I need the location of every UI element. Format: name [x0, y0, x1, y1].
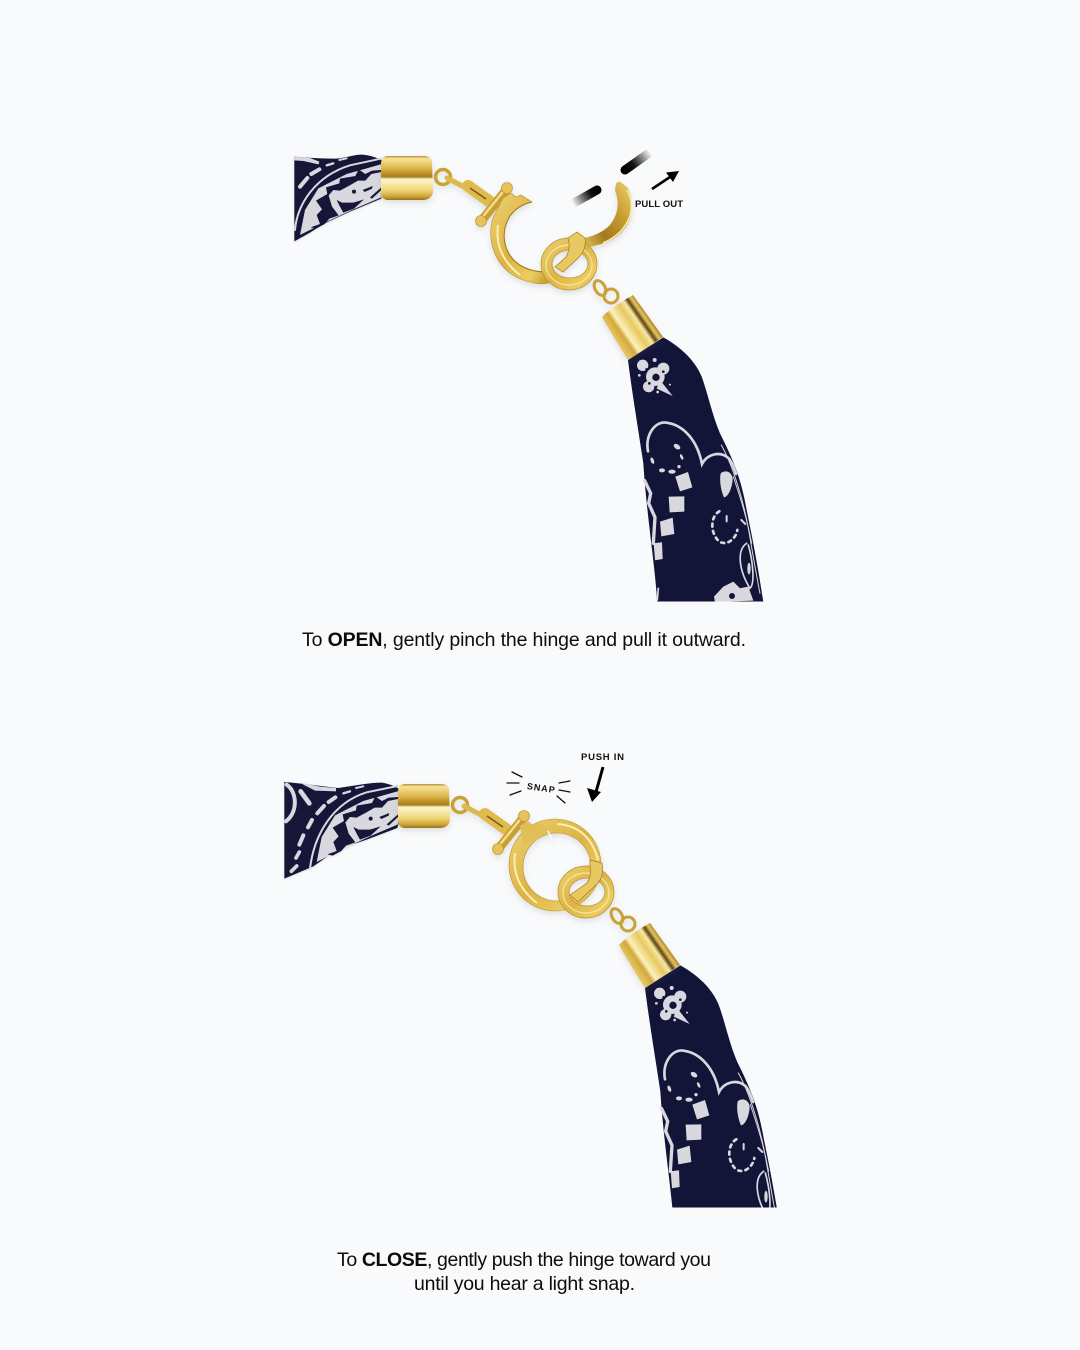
- caption: close: [337, 1249, 711, 1295]
- lower chain links: [592, 279, 618, 303]
- right bandana fabric: [628, 337, 764, 607]
- label: push in: PUSH IN: [581, 752, 624, 763]
- lower end cap: [619, 923, 680, 988]
- chain link and hinge: [436, 170, 512, 226]
- left bandana fabric: [284, 782, 399, 879]
- small connecting ring: [558, 866, 614, 918]
- small connecting ring: [541, 238, 597, 290]
- icon: snap ticks: [507, 772, 570, 803]
- gold hardware: [381, 156, 663, 360]
- leaf: [720, 471, 733, 497]
- arrow: pull out: [652, 171, 679, 189]
- open C-shaped ring: [491, 193, 549, 284]
- lower end cap: [602, 295, 663, 360]
- flower: [637, 360, 648, 371]
- caption: close: until you hear a light snap.: [414, 1273, 635, 1295]
- leaf: [737, 1099, 750, 1125]
- label: snap: SNAP: [526, 781, 555, 795]
- arrow: push in: [587, 767, 603, 802]
- left bandana fabric: [294, 155, 383, 241]
- small dots: [659, 468, 665, 472]
- hinged arm pulled out: [584, 182, 632, 248]
- panel: close step: [284, 752, 781, 1295]
- small dots: [676, 1096, 682, 1100]
- label: pull out: PULL OUT: [635, 199, 683, 210]
- gold hardware: [398, 784, 680, 988]
- closed ring: [509, 819, 601, 911]
- checker squares: [675, 472, 692, 491]
- caption: open: To OPEN, gently pinch the hinge and pull it outward.: [302, 629, 746, 651]
- caption: close: To CLOSE, gently push the hinge toward you: [337, 1249, 711, 1271]
- panel: open step: [294, 153, 764, 651]
- right bandana fabric: [645, 965, 777, 1208]
- left end cap: [381, 156, 433, 200]
- arm passing through ring: [570, 860, 602, 902]
- checker squares: [692, 1100, 709, 1119]
- chain link and hinge: [452, 798, 530, 854]
- lower chain links: [609, 907, 635, 931]
- arm passing through ring: [555, 232, 585, 272]
- flower: [654, 988, 665, 999]
- left end cap: [398, 784, 450, 828]
- motion blur marks: [574, 153, 649, 203]
- lower flower: [714, 582, 753, 602]
